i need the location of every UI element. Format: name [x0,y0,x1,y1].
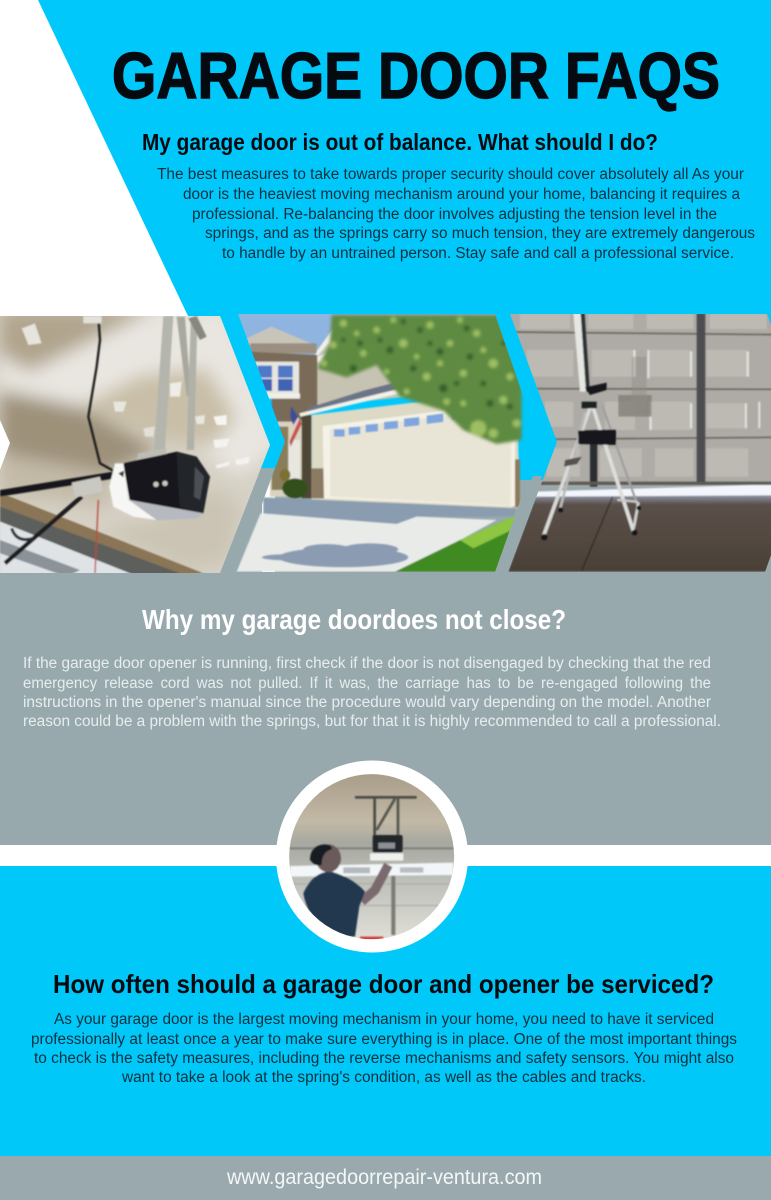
heading: service frequency: How often should a garage door and opener be serviced? [53,969,714,999]
rail bar [0,472,115,497]
chevron strips between photos [0,468,771,573]
door below [0,521,132,573]
text block: service frequency answer: As your garage door is the largest moving mechanism in your home, you need to have it serviced [54,1011,714,1028]
stone base [312,468,324,498]
red mark [360,937,383,941]
door windows [333,412,455,438]
vertical tracks [697,313,705,483]
arm [5,497,82,563]
section two: door does not close [23,604,721,730]
text block: door does not close answer: If the garage door opener is running, first check if the door is not disengaged by checking that the red [23,655,711,672]
opener cover [109,463,157,520]
text block: door does not close answer [23,655,721,730]
footer website address: www.garagedoorrepair-ventura.com [226,1166,542,1189]
upper siding [316,340,406,406]
turret window [254,362,299,397]
text block: balance answer: professional. Re-balancing the door involves adjusting the tension level in the [192,206,717,223]
section one: balance question [142,129,755,262]
garage wall [312,390,520,508]
ceiling patches [22,323,42,345]
opener body [123,452,210,513]
technician shirt [303,872,365,937]
wire [88,317,115,472]
red cord [95,500,98,573]
panel highlights [633,350,760,430]
bright floor line [535,484,771,497]
dappled shadow [262,543,408,567]
panel seams [510,332,771,439]
opener [373,835,403,852]
flag [294,416,302,427]
technician arm [362,865,388,902]
text block: door does not close answer: emergency release cord was not pulled. If it was, the carriage has to be re-engaged following the [23,675,711,692]
driveway shadow [263,497,517,524]
technician photo [287,770,457,943]
text block: balance answer [157,166,755,262]
garage door lines [290,847,453,849]
garage door frame [323,402,515,507]
rail [0,507,180,580]
roof [306,383,396,412]
photo: house with garage door [230,313,523,572]
photo: garage door opener on ceiling [0,310,280,580]
panel: grey section background [0,572,771,846]
ceiling bracket [355,796,417,799]
plants [282,478,308,498]
opener underside [130,500,203,521]
text block: balance answer: The best measures to take towards proper security should cover absolutely all As your [157,166,744,183]
white divider band [0,845,771,866]
technician head [316,844,341,872]
text block: balance answer: to handle by an untrained person. Stay safe and call a professional service. [222,245,734,262]
turret [246,326,310,349]
section three: service frequency [31,969,737,1086]
stone column [302,415,312,498]
lawn [395,530,510,572]
panel: top cyan background [0,0,771,480]
text block: service frequency answer [31,1011,737,1086]
heading: door does not close: Why my garage doordoes not close? [142,604,566,635]
tree [317,315,522,444]
photo: stepladder in front of garage door [490,313,771,572]
text block: door does not close answer: instructions in the opener's manual since the procedure would vary depending on the model. Another [23,694,711,711]
white corner triangle [0,0,188,316]
circle photo: technician adjusting opener [276,760,468,952]
white notch at left edge [0,316,14,573]
text block: service frequency answer: to check is the safety measures, including the reverse mechanisms and safety sensors. You might also [34,1050,734,1067]
ladder [543,407,638,537]
entry [270,422,303,497]
text block: service frequency answer: want to take a look at the spring's condition, as well as the cables and tracks. [121,1069,646,1086]
text block: balance answer: door is the heaviest moving mechanism around your home, balancing it requires a [183,186,740,203]
bracket [72,477,103,497]
wood trim [0,493,203,577]
concrete [237,513,497,572]
text block: balance answer: springs, and as the springs carry so much tension, they are extremely dangerous [205,225,755,242]
text block: service frequency answer: professionally at least once a year to make sure everything is in place. One of the most important things [31,1031,737,1048]
door panels [520,314,767,477]
panel: footer bar [0,1156,771,1200]
shadow on door [618,395,652,417]
panel: bottom cyan background [0,866,771,1156]
floor [508,495,771,572]
white circle ring [276,760,468,952]
bright window band [290,863,453,877]
garage door [330,408,512,506]
hanger straps [154,316,173,450]
text block: door does not close answer: reason could be a problem with the springs, but for that it is highly recommended to call a professional. [23,713,721,730]
heading: balance question: My garage door is out of balance. What should I do? [142,129,658,155]
